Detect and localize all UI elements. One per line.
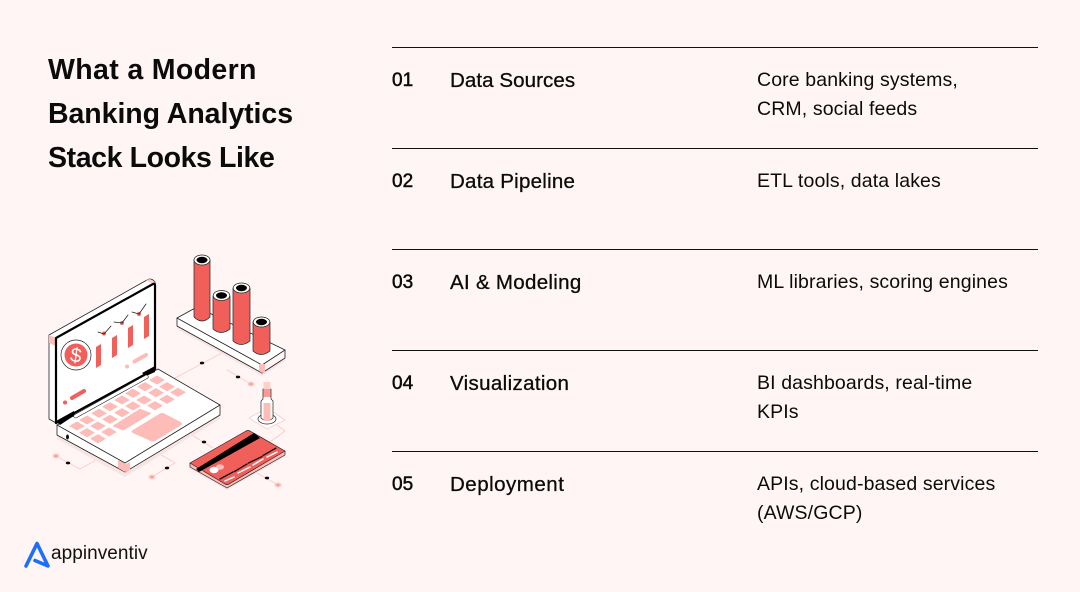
dollar coin bbox=[61, 340, 91, 370]
row 02: data pipeline: Data Pipeline bbox=[450, 170, 575, 193]
row 04: visualization: Visualization bbox=[450, 372, 569, 395]
laptop shadow bbox=[57, 415, 220, 477]
trackpad bbox=[132, 414, 182, 441]
cylinder 3 bbox=[233, 283, 250, 344]
cylinder 2 bbox=[213, 290, 230, 332]
screen bars bbox=[96, 312, 149, 368]
laptop screen lid bbox=[49, 279, 155, 423]
chart tray and cylinders bbox=[177, 255, 285, 376]
logo icon bbox=[24, 542, 50, 568]
row 03: AI and modeling bbox=[392, 270, 1008, 294]
row 01: data sources: Core banking systems, bbox=[757, 68, 958, 90]
keyboard bbox=[70, 376, 185, 443]
title bbox=[48, 54, 293, 174]
row 05: deployment: 05 bbox=[392, 474, 413, 495]
laptop bbox=[49, 279, 220, 477]
spacebar bbox=[113, 409, 151, 430]
cylinder 4 bbox=[253, 317, 270, 354]
row 01: data sources bbox=[392, 68, 958, 120]
row 05: deployment bbox=[392, 472, 995, 524]
row 05: deployment: (AWS/GCP) bbox=[757, 502, 862, 524]
row 04: visualization bbox=[392, 372, 972, 422]
row 02: data pipeline bbox=[392, 170, 941, 193]
title: What a Modern bbox=[48, 54, 257, 86]
row 04: visualization: 04 bbox=[392, 373, 413, 394]
row 04: visualization: KPIs bbox=[757, 400, 799, 422]
credit card bbox=[190, 430, 285, 490]
title: Banking Analytics bbox=[48, 98, 293, 130]
row 01: data sources: 01 bbox=[392, 70, 413, 91]
cylinder 1 bbox=[194, 255, 210, 321]
hinge bbox=[74, 375, 148, 418]
row 05: deployment: APIs, cloud-based services bbox=[757, 472, 995, 494]
row 01: data sources: Data Sources bbox=[450, 69, 575, 92]
row 03: AI and modeling: 03 bbox=[392, 272, 413, 293]
row 05: deployment: Deployment bbox=[450, 473, 564, 496]
row 02: data pipeline: 02 bbox=[392, 171, 413, 192]
row 03: AI and modeling: AI & Modeling bbox=[450, 271, 582, 294]
laptop base bbox=[57, 369, 220, 472]
connector lines and nodes bbox=[54, 353, 285, 486]
row 03: AI and modeling: ML libraries, scoring engines bbox=[757, 270, 1008, 292]
screen labels bbox=[127, 355, 146, 366]
title: Stack Looks Like bbox=[48, 142, 274, 174]
row 01: data sources: CRM, social feeds bbox=[757, 98, 917, 120]
logo: appinventiv bbox=[24, 542, 148, 568]
row 04: visualization: BI dashboards, real-time bbox=[757, 372, 972, 394]
beacon on tile bbox=[249, 382, 285, 429]
logo wordmark: appinventiv bbox=[51, 543, 148, 564]
row 02: data pipeline: ETL tools, data lakes bbox=[757, 170, 941, 192]
laptop: $ bbox=[69, 344, 83, 368]
